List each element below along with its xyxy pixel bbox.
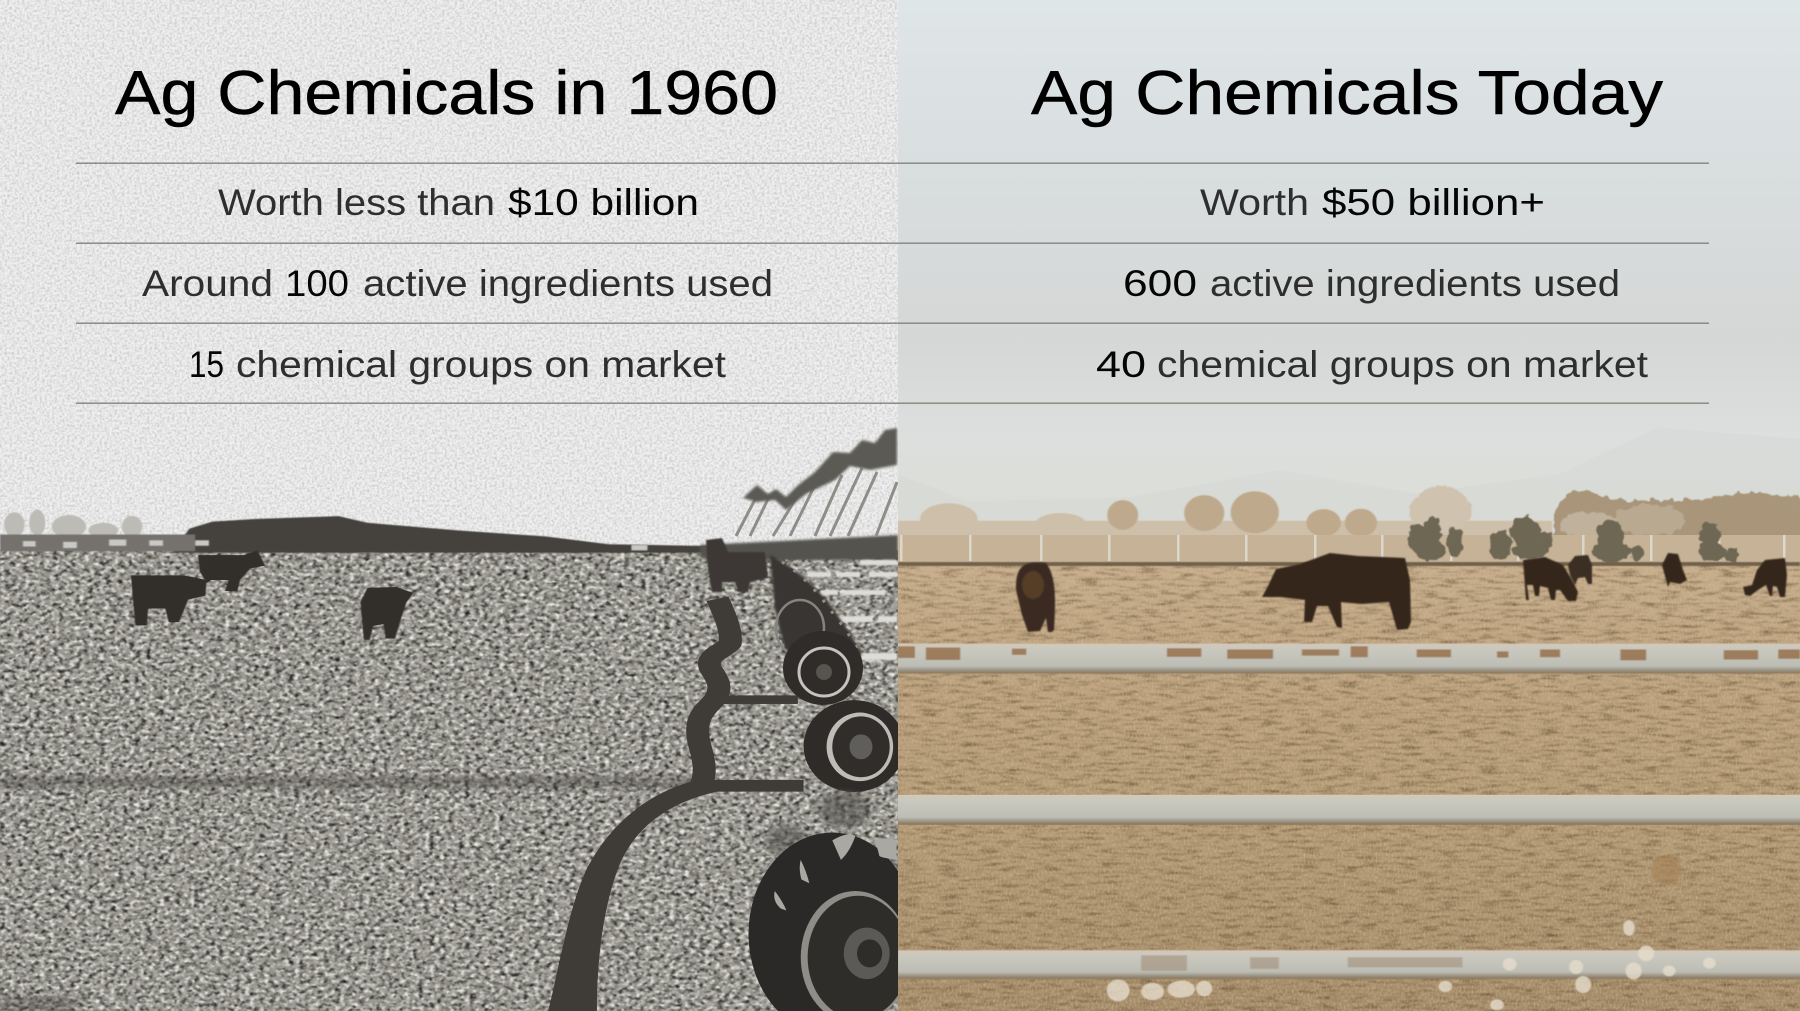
back meadow with fence [898,535,1800,564]
tire chain [770,555,862,668]
cow three [360,587,413,640]
stat: 1960 active ingredients: Around [142,263,273,304]
cow six [1743,558,1787,597]
cow five [1662,553,1687,587]
stat: 1960 value: $10 billion [508,182,699,223]
heading: today: Ag Chemicals Today [1031,59,1663,128]
cow facing away [1016,563,1055,632]
cactus bushes [1408,516,1739,563]
far cow [706,538,768,592]
stat: 1960 active ingredients [142,263,773,304]
tractor track shadow upper [698,599,730,784]
lower fence pipe [898,950,1800,979]
back tree line [1410,486,1800,540]
irrigation rails [807,560,897,660]
stat: 1960 chemical groups: 15 [189,344,224,385]
tractor track shadow lower [548,780,718,1011]
grass texture [898,564,1800,1011]
tread knobs [782,562,858,650]
paper sky [0,0,898,560]
black and white scene [0,510,916,1011]
tire three [804,700,905,792]
stat: today value [1200,182,1545,223]
stat: today active ingredients: 600 [1123,263,1197,304]
panel: today photo background [898,0,1800,1011]
far buildings [0,534,195,551]
dry grass tuft [1651,855,1681,884]
main cow [1262,553,1411,630]
receding tire [776,600,824,656]
field shadow bands [0,776,718,1011]
ground line [898,562,1800,566]
stat: 1960 active ingredients: 100 [285,263,349,304]
irrigation machinery [700,428,898,705]
irrigation legs [736,468,897,536]
hazy sky [898,0,1800,545]
pale tree line [898,503,1552,536]
horizon hill [172,516,712,553]
heading: 1960: Ag Chemicals in 1960 [115,59,778,128]
stat: today value: $50 billion+ [1322,182,1545,223]
divider lines [76,162,1709,404]
stat: today chemical groups: chemical groups on market [1157,344,1649,385]
cow one [131,575,207,625]
round trees [1107,491,1377,537]
stat: 1960 active ingredients: active ingredients used [363,263,773,304]
ground behind rails [700,535,898,560]
field patch above big tire [818,790,870,829]
stat: today value: Worth [1200,182,1309,223]
stat: today active ingredients: active ingredients used [1210,263,1620,304]
field texture [0,550,898,1011]
stat: today chemical groups: 40 [1096,344,1146,385]
rusty fence pipe [898,644,1800,674]
distant mountains [898,427,1800,532]
stat: 1960 value [218,182,699,223]
panel: 1960 photo background [0,0,916,1011]
cow four [1568,555,1592,585]
big foreground tire [748,832,898,1011]
middle fence pipe [898,795,1800,825]
cow three [1523,557,1578,601]
horizontal wheel shadows [706,695,804,792]
stat: 1960 value: Worth less than [218,182,495,223]
irrigation jagged tops [743,428,897,510]
blurred seed heads [1107,920,1716,1010]
distant trees [4,510,142,538]
stat: 1960 chemical groups: chemical groups on market [236,344,727,385]
cow two [198,550,265,591]
tire two [783,631,863,705]
